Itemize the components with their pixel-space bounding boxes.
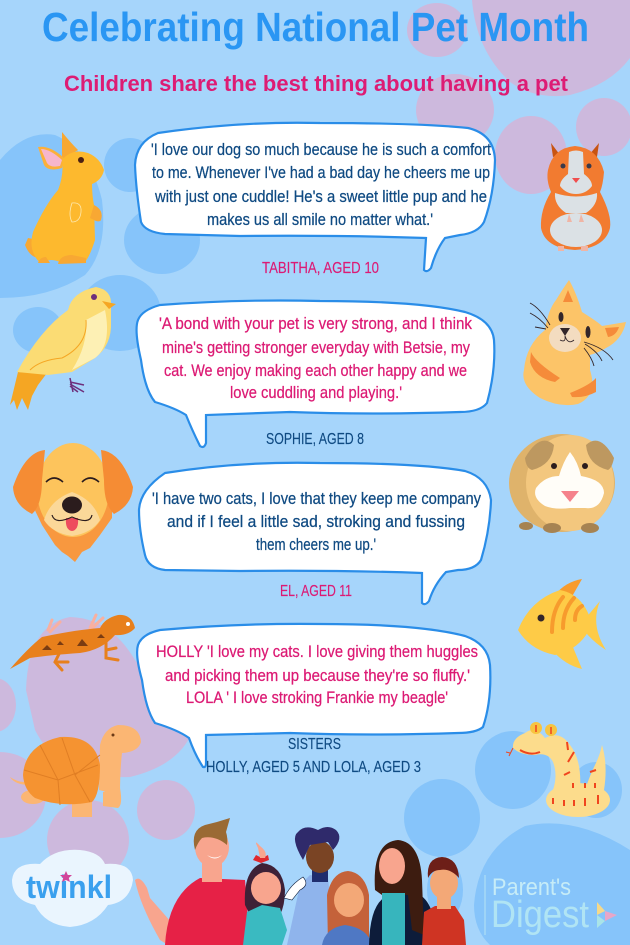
- quote text: 'A bond with your pet is very strong, and I think: [159, 314, 472, 333]
- quote text: makes us all smile no matter what.': [207, 210, 433, 229]
- icon: gecko: [10, 615, 135, 670]
- attribution: SOPHIE, AGED 8: [266, 431, 364, 448]
- boy: [422, 857, 466, 945]
- icon: hamster: [541, 143, 610, 251]
- speech bubble: [139, 463, 491, 604]
- icon: rabbit: [25, 132, 104, 264]
- icon: tortoise: [10, 725, 141, 817]
- quote text: [151, 140, 491, 229]
- quote text: LOLA ' I love stroking Frankie my beagle': [186, 688, 448, 707]
- quote text: to me. Whenever I've had a bad day he cheers me up: [152, 163, 490, 182]
- attribution: [206, 736, 421, 776]
- icon: dog: [13, 443, 133, 562]
- girl with bow: [243, 842, 287, 945]
- woman with long hair: [369, 840, 437, 945]
- subtitle: Children share the best thing about having a pet: [64, 71, 569, 96]
- speech bubble: [137, 300, 494, 447]
- attribution: EL, AGED 11: [280, 583, 352, 600]
- quote text: and if I feel a little sad, stroking and fussing: [167, 512, 465, 531]
- quote text: [152, 489, 481, 554]
- panel: Holly and Lola quote: [137, 624, 490, 776]
- quote text: HOLLY 'I love my cats. I love giving them huggles: [156, 642, 478, 661]
- quote text: and picking them up because they're so fluffy.': [165, 666, 470, 685]
- speech bubble: [135, 123, 495, 271]
- icon: canary bird: [10, 287, 116, 410]
- quote text: [156, 642, 478, 707]
- icon: snake: [506, 722, 610, 817]
- man: [135, 818, 250, 945]
- logo: Parent's Digest: [484, 874, 617, 936]
- quote text: them cheers me up.': [256, 535, 376, 554]
- attribution: SISTERS: [288, 736, 341, 753]
- quote text: 'I have two cats, I love that they keep me company: [152, 489, 481, 508]
- attribution: HOLLY, AGED 5 AND LOLA, AGED 3: [206, 759, 421, 776]
- logo: Parent's Digest: Digest: [491, 894, 589, 936]
- attribution: TABITHA, AGED 10: [262, 260, 379, 277]
- icon: guinea pig: [509, 434, 615, 533]
- quote text: 'I love our dog so much because he is such a comfort: [151, 140, 491, 159]
- icon: tropical fish: [518, 579, 606, 669]
- quote text: cat. We enjoy making each other happy and we: [164, 361, 467, 380]
- panel: El quote: [139, 463, 491, 604]
- quote text: with just one cuddle! He's a sweet little pup and he: [154, 187, 487, 206]
- panel: Tabitha quote: [135, 123, 495, 277]
- logo: twinkl: twinkl: [26, 869, 112, 905]
- girl with red hair: [322, 871, 372, 945]
- quote text: love cuddling and playing.': [230, 383, 402, 402]
- woman in blue shirt: [284, 827, 339, 945]
- illustration: family group: [135, 818, 466, 945]
- quote text: [159, 314, 472, 402]
- quote text: mine's getting stronger everyday with Betsie, my: [162, 338, 470, 357]
- logo: twinkl: [12, 850, 133, 927]
- logo: Parent's Digest: Parent's: [492, 874, 571, 901]
- icon: ginger cat: [523, 280, 626, 405]
- panel: Sophie quote: [137, 300, 494, 448]
- speech bubble: [137, 624, 490, 767]
